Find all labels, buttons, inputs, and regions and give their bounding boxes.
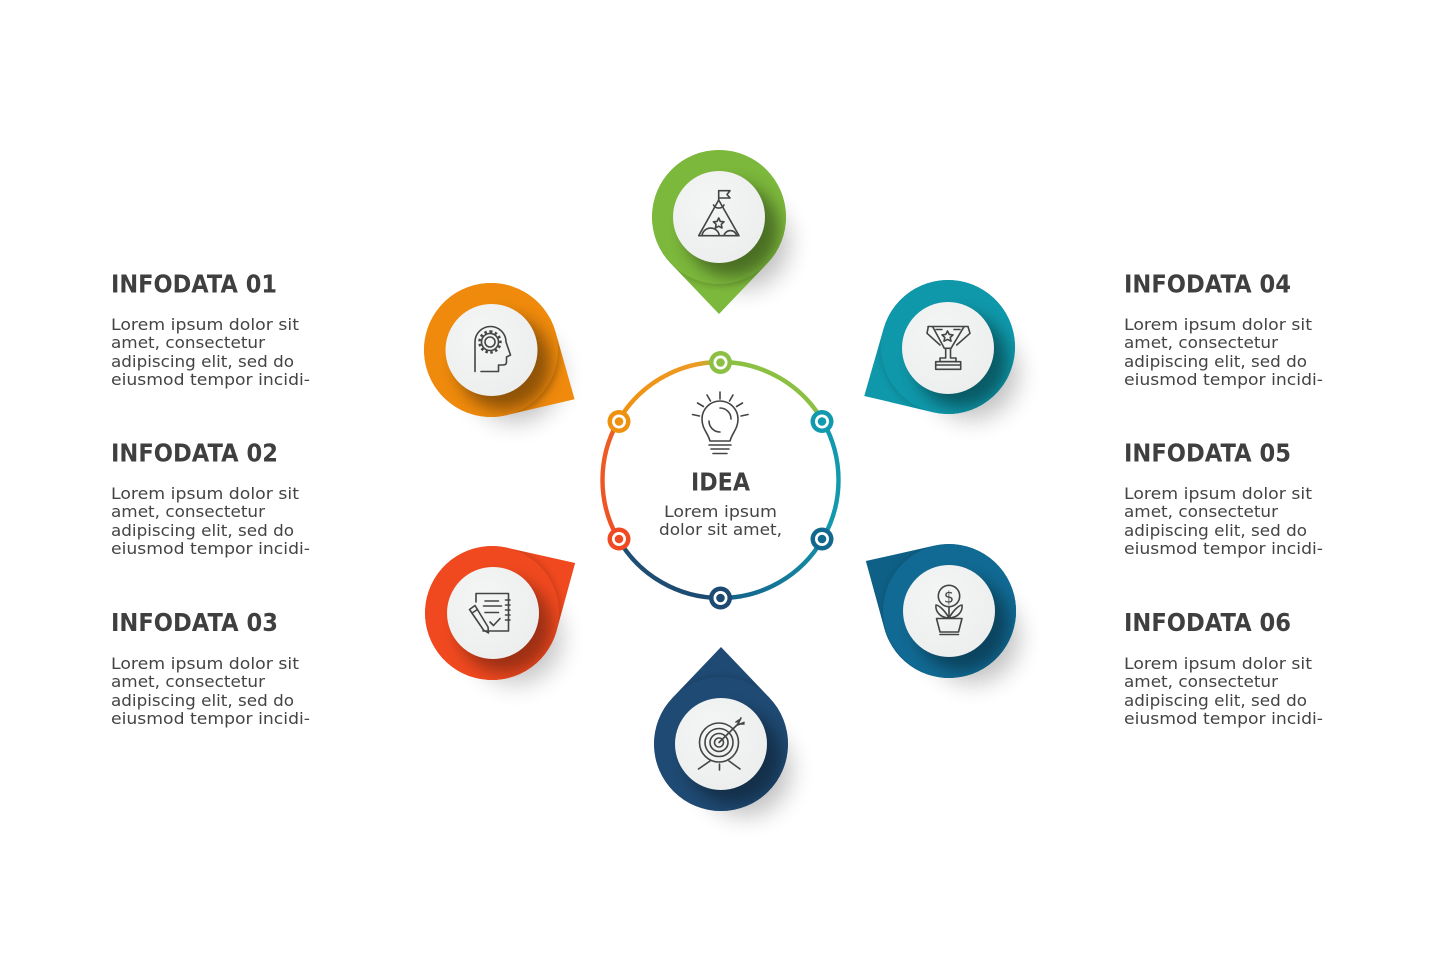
ring node: blue [810,528,834,550]
icon: money plant [936,585,962,634]
pin: blue, lower right [866,544,1030,694]
text block: INFODATA 01: eiusmod tempor incidi- [111,370,310,389]
text block: INFODATA 05 [1124,438,1323,558]
text block: INFODATA 01 [111,270,310,389]
pin: navy, bottom [654,647,791,816]
text block: INFODATA 05: amet, consectetur [1124,502,1278,521]
center heading: IDEA: IDEA [691,468,751,496]
text block: INFODATA 05: eiusmod tempor incidi- [1124,539,1323,558]
text block: INFODATA 01: Lorem ipsum dolor sit [111,315,299,334]
text block: INFODATA 06: adipiscing elit, sed do [1124,691,1307,710]
text block: INFODATA 06: Lorem ipsum dolor sit [1124,654,1312,673]
text block: INFODATA 02: Lorem ipsum dolor sit [111,484,299,503]
ring node: red [608,528,630,550]
text block: INFODATA 04: amet, consectetur [1124,333,1278,352]
text block: INFODATA 03: eiusmod tempor incidi- [111,709,310,728]
text block: INFODATA 01: amet, consectetur [111,333,265,352]
ring arc segments [602,362,839,598]
text block: INFODATA 04: INFODATA 04 [1124,270,1291,298]
ring node: green [709,351,732,374]
text block: INFODATA 06: INFODATA 06 [1124,608,1291,637]
text block: INFODATA 02: INFODATA 02 [111,438,278,468]
center text [659,502,782,539]
icon: head with gear [475,326,510,372]
text block: INFODATA 04: eiusmod tempor incidi- [1124,370,1323,389]
icon: document with pen [470,594,510,633]
text block: INFODATA 04: Lorem ipsum dolor sit [1124,315,1312,334]
panel: central idea ring [602,351,839,610]
text block: INFODATA 02 [111,438,310,558]
text block: INFODATA 04 [1124,270,1323,389]
pin: orange, upper left [424,283,575,433]
text block: INFODATA 05: adipiscing elit, sed do [1124,521,1307,540]
center text: Lorem ipsum [664,502,777,521]
text block: INFODATA 03: Lorem ipsum dolor sit [111,654,299,673]
icon: light bulb [692,392,748,454]
text block: INFODATA 02: amet, consectetur [111,502,265,521]
text block: INFODATA 05: Lorem ipsum dolor sit [1124,484,1312,503]
pin: red, lower left [424,546,576,694]
text block: INFODATA 01: adipiscing elit, sed do [111,352,294,371]
pin: green, top [652,150,789,314]
text block: INFODATA 02: eiusmod tempor incidi- [111,539,310,558]
ring node: navy [709,586,732,610]
ring node: teal [810,410,834,433]
text block: INFODATA 01: INFODATA 01 [111,270,277,298]
text block: INFODATA 03 [111,608,310,728]
icon: trophy [927,326,970,369]
text block: INFODATA 03: amet, consectetur [111,672,265,691]
text block: INFODATA 03: INFODATA 03 [111,608,278,637]
text block: INFODATA 05: INFODATA 05 [1124,438,1291,468]
center text: dolor sit amet, [659,520,782,539]
text block: INFODATA 03: adipiscing elit, sed do [111,691,294,710]
text block: INFODATA 04: adipiscing elit, sed do [1124,352,1307,371]
ring node: orange [608,410,630,433]
icon: target with arrow [698,718,744,770]
text block: INFODATA 06: eiusmod tempor incidi- [1124,709,1323,728]
text block: INFODATA 06 [1124,608,1323,728]
text block: INFODATA 06: amet, consectetur [1124,672,1278,691]
icon: dollar sign: $ [944,588,954,606]
pin: teal, upper right [864,280,1029,430]
text block: INFODATA 02: adipiscing elit, sed do [111,521,294,540]
icon: flag on mountain [699,191,739,236]
